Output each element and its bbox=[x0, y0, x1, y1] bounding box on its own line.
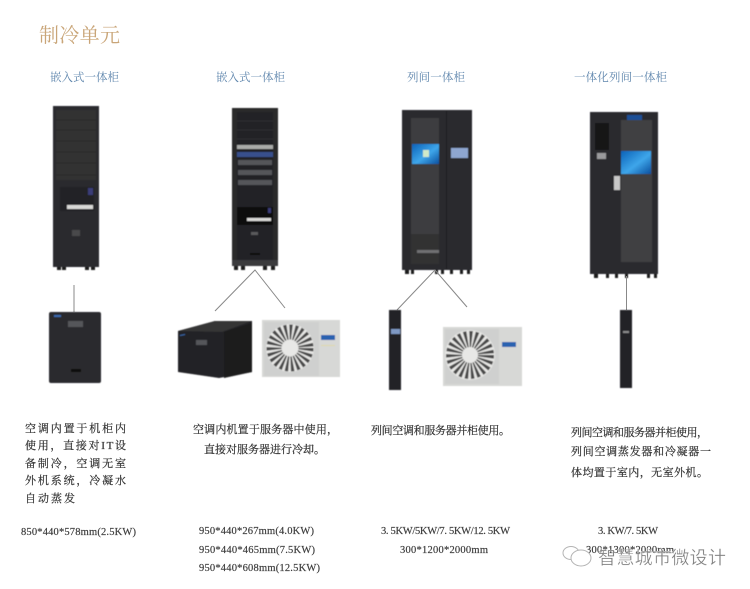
text: column 1 description: 备制冷，空调无室 bbox=[25, 456, 126, 470]
panel: column 1 embedded cabinet bbox=[21, 70, 136, 538]
icon: cabinet 2 bbox=[232, 108, 278, 270]
text: column 4 specs bbox=[586, 526, 674, 556]
text: column 1 description: 空调内置于机柜内 bbox=[25, 421, 126, 435]
text: column 3 specs: 300*1200*2000mm bbox=[400, 545, 488, 556]
text: column 2 description bbox=[193, 422, 338, 456]
text: column 3 specs: 3. 5KW/5KW/7. 5KW/12. 5KW bbox=[381, 526, 510, 537]
heading: column 1: 嵌入式一体柜 bbox=[50, 70, 120, 84]
text: column 4 specs: 300*1300*2000mm bbox=[586, 545, 674, 556]
text: column 3 description: 列间空调和服务器并柜使用。 bbox=[371, 423, 510, 437]
icon: in-row air conditioner bbox=[389, 310, 401, 390]
heading: column 4: 一体化列间一体柜 bbox=[574, 70, 668, 84]
icon: in-rack air conditioner bbox=[49, 312, 101, 383]
text: column 4 specs: 3. KW/7. 5KW bbox=[598, 526, 658, 537]
icon: cabinet 3 bbox=[402, 110, 472, 274]
text: column 1 description: 自动蒸发 bbox=[25, 491, 75, 505]
icon: chat bubbles bbox=[563, 546, 591, 566]
connector: cabinet 1 to unit bbox=[73, 285, 75, 312]
panel: column 4 integrated in-row cabinet bbox=[571, 70, 711, 556]
text: column 2 description: 空调内机置于服务器中使用， bbox=[193, 422, 338, 436]
text: column 4 description bbox=[571, 425, 711, 479]
text: column 4 description: 列间空调蒸发器和冷凝器一 bbox=[571, 444, 711, 458]
text: column 4 description: 体均置于室内，无室外机。 bbox=[571, 465, 708, 479]
heading: column 2: 嵌入式一体柜 bbox=[216, 70, 286, 84]
heading: column 3: 列间一体柜 bbox=[407, 70, 466, 84]
text: column 3 specs bbox=[381, 526, 510, 556]
text: column 1 description: 使用，直接对IT设 bbox=[25, 438, 126, 452]
watermark bbox=[563, 546, 726, 568]
panel: column 3 in-row cabinet bbox=[371, 70, 522, 556]
panel: column 2 embedded cabinet bbox=[178, 70, 340, 574]
icon: cabinet 4 bbox=[590, 112, 658, 278]
text: column 1 description bbox=[25, 421, 126, 505]
text: column 2 specs: 950*440*267mm(4.0KW) bbox=[199, 526, 314, 537]
text: column 2 specs bbox=[199, 526, 320, 574]
icon: cabinet 1 bbox=[53, 106, 99, 270]
text: watermark name: 智慧城市微设计 bbox=[598, 548, 726, 568]
icon: integrated in-row air conditioner bbox=[620, 310, 632, 388]
icon: outdoor fan unit bbox=[443, 327, 522, 386]
text: column 2 description: 直接对服务器进行冷却。 bbox=[204, 442, 325, 456]
connectors: cabinet 3 to units bbox=[397, 270, 467, 310]
icon: rack-mount indoor unit bbox=[178, 321, 252, 378]
text: column 2 specs: 950*440*608mm(12.5KW) bbox=[199, 563, 320, 574]
text: column 1 description: 外机系统，冷凝水 bbox=[25, 473, 126, 487]
text: column 2 specs: 950*440*465mm(7.5KW) bbox=[199, 545, 316, 556]
text: column 4 description: 列间空调和服务器并柜使用， bbox=[571, 425, 708, 439]
icon: outdoor fan unit bbox=[262, 320, 340, 377]
connectors: cabinet 2 to units bbox=[215, 270, 285, 311]
text: column 1 specs: 850*440*578mm(2.5KW) bbox=[21, 527, 136, 538]
title: 制冷单元 bbox=[39, 24, 120, 47]
connector: cabinet 4 to unit bbox=[626, 276, 628, 310]
